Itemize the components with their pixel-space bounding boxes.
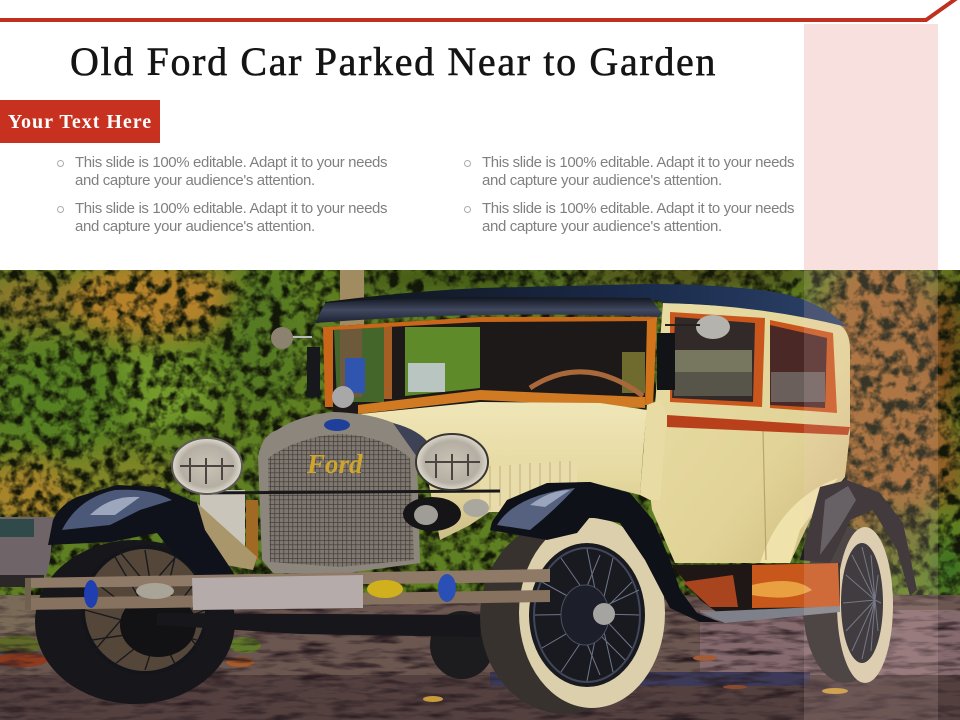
mirrors and lamps (271, 315, 730, 397)
ground with fallen leaves (0, 595, 960, 720)
right front fender (490, 482, 720, 622)
bullet: left bottom: This slide is 100% editable. Adapt it to your needs (75, 200, 387, 217)
bullet: left bottom (57, 200, 387, 235)
bullet: left top: This slide is 100% editable. Adapt it to your needs (75, 154, 387, 171)
hood louvres (480, 460, 577, 512)
bullet: left bottom: and capture your audience's attention. (75, 218, 315, 235)
bullet: left top (57, 154, 387, 189)
bullet: right top: This slide is 100% editable. Adapt it to your needs (482, 154, 794, 171)
rear fender (800, 480, 917, 596)
rear wheel (803, 527, 893, 683)
background foliage (0, 250, 960, 610)
under-bumper bar (157, 613, 480, 637)
bullet: left top: and capture your audience's attention. (75, 172, 315, 189)
bullet: right bottom: This slide is 100% editable. Adapt it to your needs (482, 200, 794, 217)
hidden far front wheel (430, 611, 494, 679)
cream apron by left fender (197, 503, 257, 570)
photo: vintage Ford car in front of a garden hedge (0, 270, 960, 720)
hood (360, 402, 647, 540)
door shading (763, 430, 766, 560)
red waist stripe (667, 415, 850, 435)
top red rule with angled end (0, 0, 958, 22)
side windows (670, 312, 837, 413)
red label: your text here (0, 100, 160, 143)
windshield (323, 317, 657, 414)
running board and rear lamps (672, 563, 840, 623)
bullet: right bottom: and capture your audience's attention. (482, 218, 722, 235)
license plate (192, 575, 363, 610)
lamp bar (190, 491, 500, 493)
parked car behind (0, 517, 54, 587)
translucent side band over photo (804, 270, 938, 720)
title: Old Ford Car Parked Near to Garden (70, 38, 717, 84)
radiator grille (258, 412, 430, 574)
right front wheel (480, 518, 665, 714)
visor (315, 297, 662, 323)
bullet: right bottom (464, 200, 794, 235)
headlights (172, 434, 489, 531)
bullet: right top (464, 154, 794, 189)
red label: your text here: Your Text Here (8, 111, 152, 133)
left front fender (48, 485, 235, 575)
front bumper (25, 569, 550, 610)
left front wheel (35, 540, 235, 704)
tree trunk (340, 270, 364, 330)
white post behind (200, 490, 245, 550)
pink side panel (804, 24, 938, 270)
radiator grille: Ford (306, 449, 363, 479)
bullet: right top: and capture your audience's attention. (482, 172, 722, 189)
roof (325, 284, 847, 327)
car (25, 284, 917, 714)
cabin body (646, 303, 850, 563)
